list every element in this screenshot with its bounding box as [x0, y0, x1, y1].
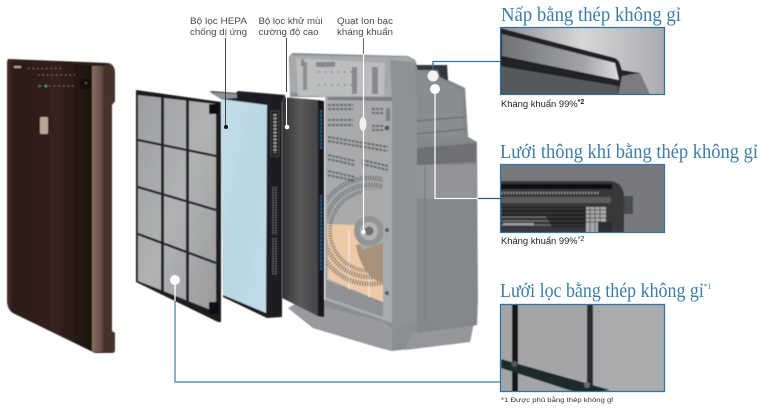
photo: stainless steel lid — [500, 27, 665, 95]
caption: lid: Kháng khuẩn 99% — [501, 98, 578, 109]
main unit body — [288, 53, 478, 351]
caption: vent mesh: Kháng khuẩn 99% — [501, 235, 578, 246]
filter: high-intensity deodorising carbon — [282, 97, 324, 317]
label: deodorising filter: Bộ lọc khử mùi — [258, 16, 322, 27]
label: silver ion fan: kháng khuẩn — [337, 27, 393, 38]
lower label plate — [326, 280, 383, 317]
heading: filter mesh: Lưới lọc bằng thép không gỉ — [500, 280, 728, 302]
callout line: lid — [428, 62, 500, 82]
photo: stainless steel vent mesh — [500, 164, 665, 233]
label: silver ion fan: Quạt Ion bạc — [337, 16, 393, 27]
caption: vent mesh: *2 — [578, 236, 584, 243]
base — [288, 301, 392, 351]
heading: lid: Nấp bằng thép không gỉ — [501, 4, 681, 26]
vent slots — [328, 105, 388, 181]
caption: lid: *2 — [578, 99, 584, 106]
front vented panel — [325, 97, 392, 323]
grille bars — [138, 97, 216, 303]
front badge — [40, 117, 48, 134]
control panel indicators — [14, 66, 90, 90]
callout line: vent mesh — [430, 84, 500, 198]
peach filter area — [327, 224, 383, 302]
top compartment — [290, 55, 415, 99]
label: HEPA filter: chống dị ứng — [190, 27, 247, 38]
HEPA blue sheet — [221, 99, 267, 313]
photo: stainless steel filter mesh — [500, 304, 665, 392]
lid dark bracket — [416, 65, 448, 81]
heading: filter mesh: *1 — [704, 282, 711, 291]
side column — [390, 60, 417, 330]
label: deodorising filter: cường độ cao — [258, 27, 318, 38]
callout line: filter mesh — [170, 275, 500, 382]
printed label on frame — [271, 111, 279, 275]
side strip — [318, 100, 324, 317]
air purifier front panel — [7, 59, 115, 353]
filter: stainless steel mesh grille — [136, 90, 221, 322]
label: deodorising filter — [258, 16, 322, 129]
filter: HEPA anti-allergy — [209, 91, 285, 318]
fan — [326, 175, 384, 302]
footnote: *1 Được phủ bằng thép không gỉ — [501, 395, 614, 404]
side trim band — [92, 66, 103, 352]
label: silver ion fan — [337, 16, 393, 234]
label: HEPA filter: Bộ lọc HEPA — [190, 16, 248, 27]
label: HEPA filter — [190, 16, 248, 129]
